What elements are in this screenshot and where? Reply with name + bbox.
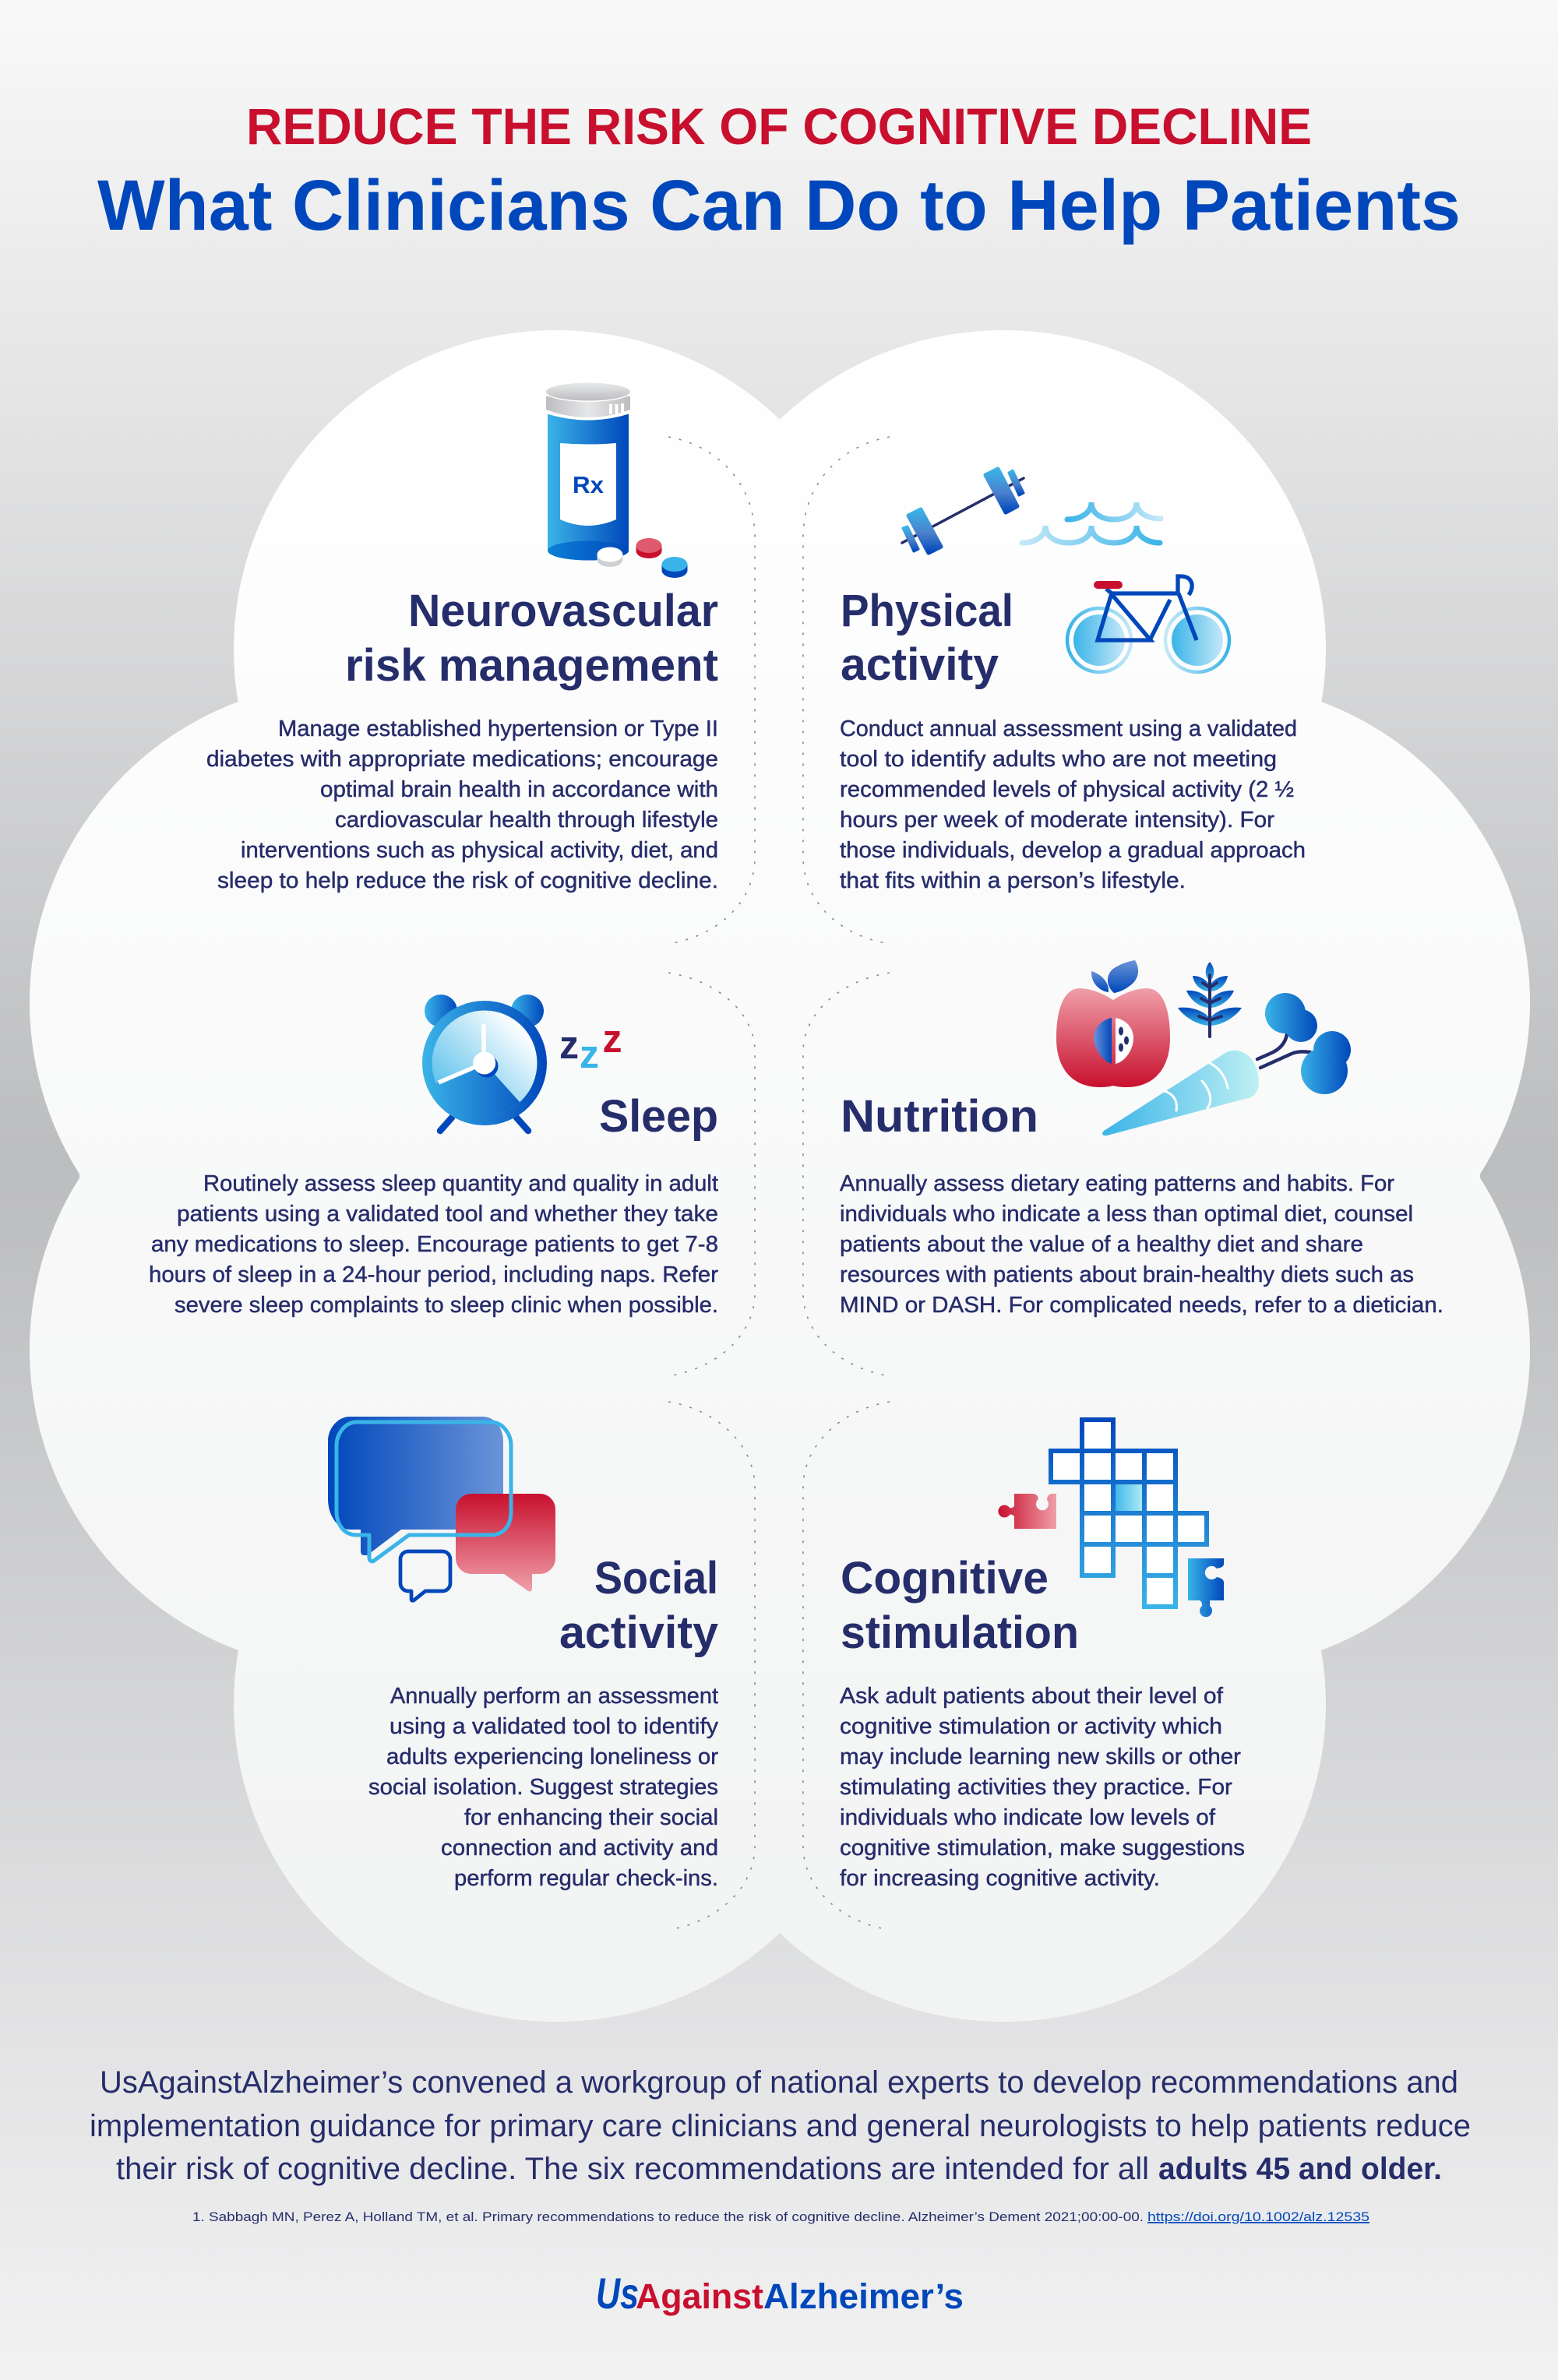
logo: Us	[596, 2269, 639, 2318]
icon: bicycle	[1067, 576, 1229, 672]
body text	[840, 1684, 1245, 1891]
logo: Against	[636, 2276, 763, 2316]
body text: patients using a validated tool and whether they take	[177, 1202, 718, 1227]
icon: pill bottle	[545, 382, 687, 578]
logo	[596, 2269, 964, 2318]
body text: optimal brain health in accordance with	[320, 777, 718, 802]
title line 1: REDUCE THE RISK OF COGNITIVE DECLINE	[246, 97, 1312, 155]
icon: zzz: z	[580, 1032, 599, 1076]
panel: physical activity	[840, 469, 1306, 893]
body text: recommended levels of physical activity (2 ½	[840, 777, 1294, 802]
body text: patients about the value of a healthy diet and share	[840, 1232, 1363, 1257]
body text: Manage established hypertension or Type II	[278, 716, 718, 741]
body text: connection and activity and	[441, 1836, 718, 1861]
heading: Nutrition	[841, 1091, 1038, 1142]
icon: red puzzle piece	[998, 1494, 1056, 1529]
body text: resources with patients about brain-healthy diets such as	[840, 1262, 1414, 1287]
body text: cognitive stimulation or activity which	[840, 1714, 1222, 1739]
heading	[841, 1553, 1079, 1658]
body text: diabetes with appropriate medications; encourage	[206, 747, 718, 772]
panel: cognitive stimulation	[840, 1420, 1245, 1891]
panel: neurovascular risk management	[206, 382, 718, 893]
heading	[345, 586, 718, 691]
icon: blue puzzle piece	[1188, 1558, 1224, 1617]
icon: pill bottle: Rx	[573, 471, 605, 498]
icon: alarm clock	[421, 995, 549, 1137]
panel: sleep	[149, 995, 719, 1318]
icon: speech bubbles	[328, 1417, 555, 1600]
body text	[149, 1171, 719, 1318]
body text: individuals who indicate a less than optimal diet, counsel	[840, 1202, 1413, 1227]
icon: zzz	[559, 1016, 622, 1076]
heading: Cognitive	[841, 1553, 1049, 1604]
body text: MIND or DASH. For complicated needs, refer to a dietician.	[840, 1293, 1443, 1318]
body text: Annually perform an assessment	[390, 1684, 718, 1709]
body text: hours per week of moderate intensity). For	[840, 808, 1275, 833]
body text	[206, 716, 718, 893]
body text: Conduct annual assessment using a validated	[840, 716, 1297, 741]
heading: risk management	[345, 640, 718, 691]
footer statement: implementation guidance for primary care clinicians and general neurologists to help patients reduce	[90, 2109, 1471, 2143]
body text	[368, 1684, 719, 1891]
panel: nutrition	[840, 960, 1443, 1318]
footer statement: UsAgainstAlzheimer’s convened a workgroup of national experts to develop recommendations and	[100, 2065, 1458, 2100]
body text: perform regular check-ins.	[454, 1866, 718, 1891]
panel: social activity	[328, 1417, 719, 1891]
body text: those individuals, develop a gradual approach	[840, 838, 1306, 863]
body text: Annually assess dietary eating patterns and habits. For	[840, 1171, 1395, 1196]
body text: any medications to sleep. Encourage patients to get 7-8	[151, 1232, 718, 1257]
icon: zzz: z	[603, 1016, 622, 1061]
body text: stimulating activities they practice. For	[840, 1775, 1233, 1800]
cloud background shape	[30, 330, 1530, 2022]
heading	[841, 586, 1013, 690]
title line 2: What Clinicians Can Do to Help Patients	[97, 166, 1461, 245]
body text: severe sleep complaints to sleep clinic when possible.	[174, 1293, 718, 1318]
body text: cognitive stimulation, make suggestions	[840, 1836, 1245, 1861]
body text: that fits within a person’s lifestyle.	[840, 868, 1186, 893]
body text: sleep to help reduce the risk of cognitive decline.	[217, 868, 718, 893]
body text: cardiovascular health through lifestyle	[335, 808, 718, 833]
body text: interventions such as physical activity, diet, and	[241, 838, 718, 863]
icon: crossword grid	[1051, 1420, 1207, 1607]
body text: for increasing cognitive activity.	[840, 1866, 1160, 1891]
heading: activity	[559, 1607, 718, 1658]
title	[97, 97, 1461, 245]
body text: social isolation. Suggest strategies	[368, 1775, 718, 1800]
body text: for enhancing their social	[464, 1805, 718, 1830]
heading: activity	[841, 639, 999, 690]
body text	[840, 716, 1306, 893]
icon: barbell	[902, 469, 1024, 553]
heading: stimulation	[841, 1607, 1079, 1658]
footer statement: adults 45 and older.	[1158, 2152, 1442, 2186]
body text: adults experiencing loneliness or	[386, 1745, 719, 1769]
heading: Social	[594, 1553, 718, 1604]
body text: individuals who indicate low levels of	[840, 1805, 1215, 1830]
body text: using a validated tool to identify	[390, 1714, 719, 1739]
icon: water waves	[1022, 502, 1161, 543]
citation: https://doi.org/10.1002/alz.12535	[1147, 2209, 1369, 2224]
body text: tool to identify adults who are not meeting	[840, 747, 1277, 772]
footer statement	[90, 2065, 1471, 2186]
icon: carrot	[1102, 993, 1351, 1135]
body text: Ask adult patients about their level of	[840, 1684, 1223, 1709]
heading: Neurovascular	[408, 586, 718, 636]
icon: apple	[1056, 960, 1170, 1087]
heading: Sleep	[599, 1091, 718, 1142]
citation: 1. Sabbagh MN, Perez A, Holland TM, et al. Primary recommendations to reduce the risk of cognitive decline. Alzheimer’s Dement 2021;00:00-00.	[192, 2209, 1144, 2224]
icon: zzz: z	[559, 1023, 579, 1067]
icon: herb sprig	[1178, 962, 1242, 1037]
logo: Alzheimer’s	[763, 2276, 964, 2316]
body text: Routinely assess sleep quantity and quality in adult	[203, 1171, 718, 1196]
body text: may include learning new skills or other	[840, 1745, 1242, 1769]
body text	[840, 1171, 1443, 1318]
heading	[559, 1553, 718, 1658]
heading: Physical	[841, 586, 1013, 636]
footer statement: their risk of cognitive decline. The six recommendations are intended for all	[116, 2152, 1149, 2186]
body text: hours of sleep in a 24-hour period, including naps. Refer	[149, 1262, 719, 1287]
